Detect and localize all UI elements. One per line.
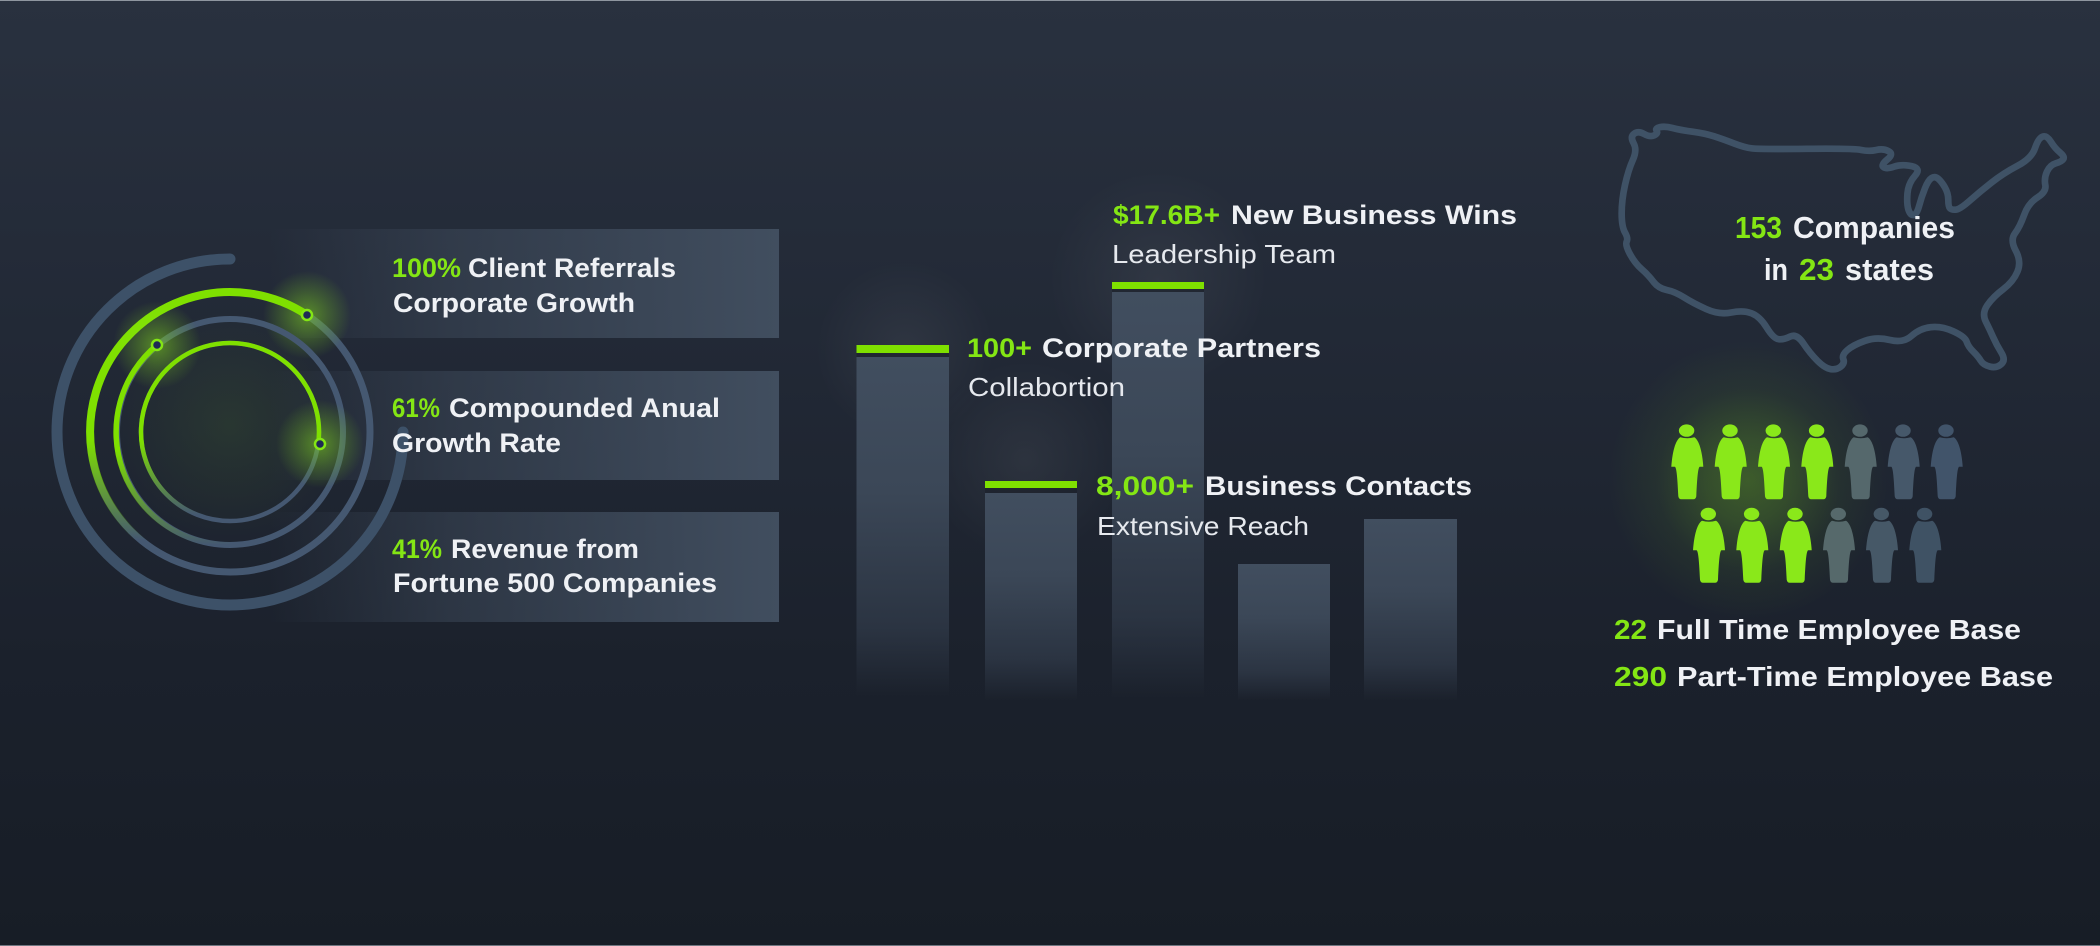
ring marker: outer — [302, 310, 312, 320]
text: business contacts: Business Contacts — [1205, 471, 1472, 501]
faint background glows — [815, 170, 1268, 560]
text: 41% revenue from fortune 500 — [392, 534, 717, 598]
ring: second track — [90, 271, 370, 572]
pictogram: bottom row of people — [1693, 508, 1941, 583]
text: 61% compounded annual growth: Growth Rate — [392, 428, 561, 458]
ring: inner track — [141, 343, 364, 521]
text: 290 part-time employee base: 290 — [1614, 661, 1667, 692]
text: 100% client referrals: Corporate Growth — [393, 288, 635, 318]
text: 22 full time employee base: Full Time Employee Base — [1657, 614, 2021, 645]
bar 3 with green cap — [1112, 282, 1204, 697]
bar 1 with green cap — [856, 345, 949, 695]
text: 61% compounded annual growth: 61% — [392, 393, 440, 423]
panel: US map — [1622, 127, 2064, 369]
text: business contacts: Extensive Reach — [1097, 511, 1309, 541]
green glow behind people — [1608, 340, 1888, 620]
text: new business wins: New Business Wins — [1231, 200, 1517, 230]
panel: 41% revenue band — [270, 512, 779, 622]
ring marker: middle — [152, 340, 162, 350]
text: new business wins: Leadership Team — [1112, 239, 1336, 269]
text: 100% client referrals: 100% — [392, 253, 461, 283]
text: 153 companies in 23 states: Companies — [1793, 210, 1955, 245]
text: corporate partners: Collabortion — [968, 372, 1125, 402]
bar 2 with green cap — [985, 481, 1077, 700]
bar 5 — [1364, 519, 1457, 700]
text: 290 part-time employee base: Part-Time Employee Base — [1677, 661, 2053, 692]
panel: client growth rings — [57, 229, 779, 622]
text: new business wins — [1112, 200, 1517, 269]
text: 153 companies in 23 states — [1735, 210, 1955, 287]
text: business contacts — [1096, 471, 1472, 541]
panel: 61% growth band — [270, 371, 779, 480]
text: new business wins: $17.6B+ — [1113, 200, 1220, 230]
text: 61% compounded annual growth: Compounded Anual — [449, 393, 720, 423]
text: 41% revenue from fortune 500: 41% — [392, 534, 442, 564]
text: 153 companies in 23 states: 23 — [1799, 252, 1834, 287]
text: 100% client referrals — [392, 253, 676, 318]
soft green glow in ring centre — [115, 310, 345, 540]
text: 41% revenue from fortune 500: Fortune 500 Companies — [393, 568, 717, 598]
text: 61% compounded annual growth — [392, 393, 720, 458]
pictogram: top row of people — [1671, 424, 1963, 499]
text: 153 companies in 23 states: 153 — [1735, 210, 1782, 245]
ring marker: inner — [315, 439, 325, 449]
text: business contacts: 8,000+ — [1096, 471, 1194, 501]
text: 22 full time employee base: 22 — [1614, 614, 1647, 645]
text: corporate partners: 100+ — [967, 333, 1032, 363]
text: 100% client referrals: Client Referrals — [468, 253, 676, 283]
text: 153 companies in 23 states: states — [1845, 252, 1934, 287]
panel: 100% client referrals band — [270, 229, 779, 338]
text: corporate partners: Corporate Partners — [1042, 333, 1321, 363]
map outline of USA — [1622, 127, 2064, 369]
text: 41% revenue from fortune 500: Revenue from — [451, 534, 639, 564]
text: corporate partners — [967, 333, 1321, 402]
ring: outer grey arc — [57, 259, 403, 605]
ring: third track — [113, 301, 343, 545]
text: 153 companies in 23 states: in — [1764, 252, 1788, 287]
bar 4 — [1238, 564, 1330, 700]
panel: bar chart section — [815, 170, 1517, 700]
panel: employee pictogram — [1608, 340, 2053, 692]
